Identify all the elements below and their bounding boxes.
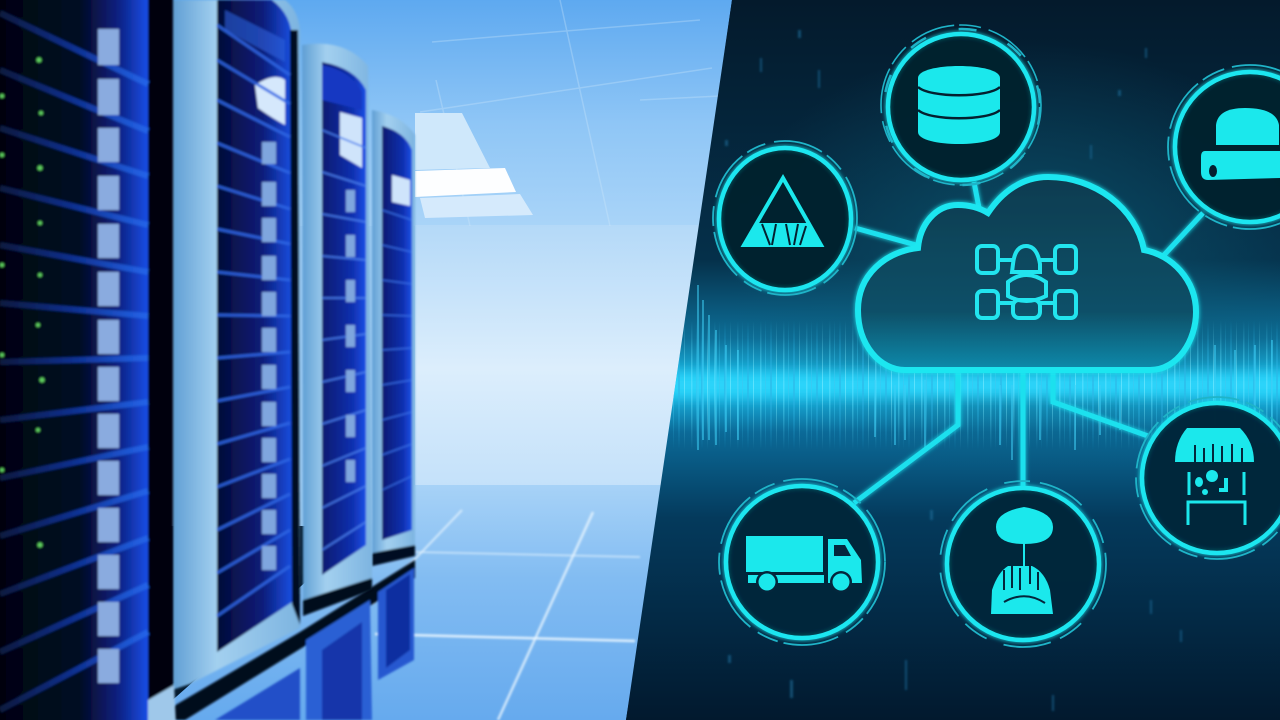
server rack 4 <box>372 110 415 566</box>
server rack 2 <box>172 0 300 690</box>
node: top right <box>1168 65 1280 229</box>
icon: truck <box>746 536 862 593</box>
icon: tree and mound <box>991 507 1053 614</box>
icon: database stack <box>918 66 1000 144</box>
ceiling <box>150 0 732 226</box>
floor <box>150 485 664 720</box>
audio waveform band <box>640 285 1280 460</box>
background specks <box>725 30 1182 711</box>
floor tile lines <box>372 510 640 720</box>
cloud <box>858 177 1196 370</box>
node: triangle <box>713 141 857 295</box>
server rack reflections on floor <box>150 560 415 720</box>
panel: data center photo <box>0 0 732 720</box>
panel: cloud network background <box>626 0 1280 720</box>
ceiling light <box>415 113 533 218</box>
icon: network nodes in cloud <box>977 246 1076 318</box>
icon: triangle <box>744 178 821 245</box>
node: tree <box>940 481 1106 647</box>
node: truck <box>719 479 885 645</box>
back wall <box>415 225 700 486</box>
icon: market stall <box>1175 428 1254 525</box>
connector lines <box>854 182 1203 503</box>
icon: dome on bed <box>1201 108 1280 180</box>
node: market stall <box>1136 397 1280 559</box>
server rack 1 <box>0 0 176 720</box>
node: database <box>881 25 1041 185</box>
server rack 3 <box>302 44 372 616</box>
